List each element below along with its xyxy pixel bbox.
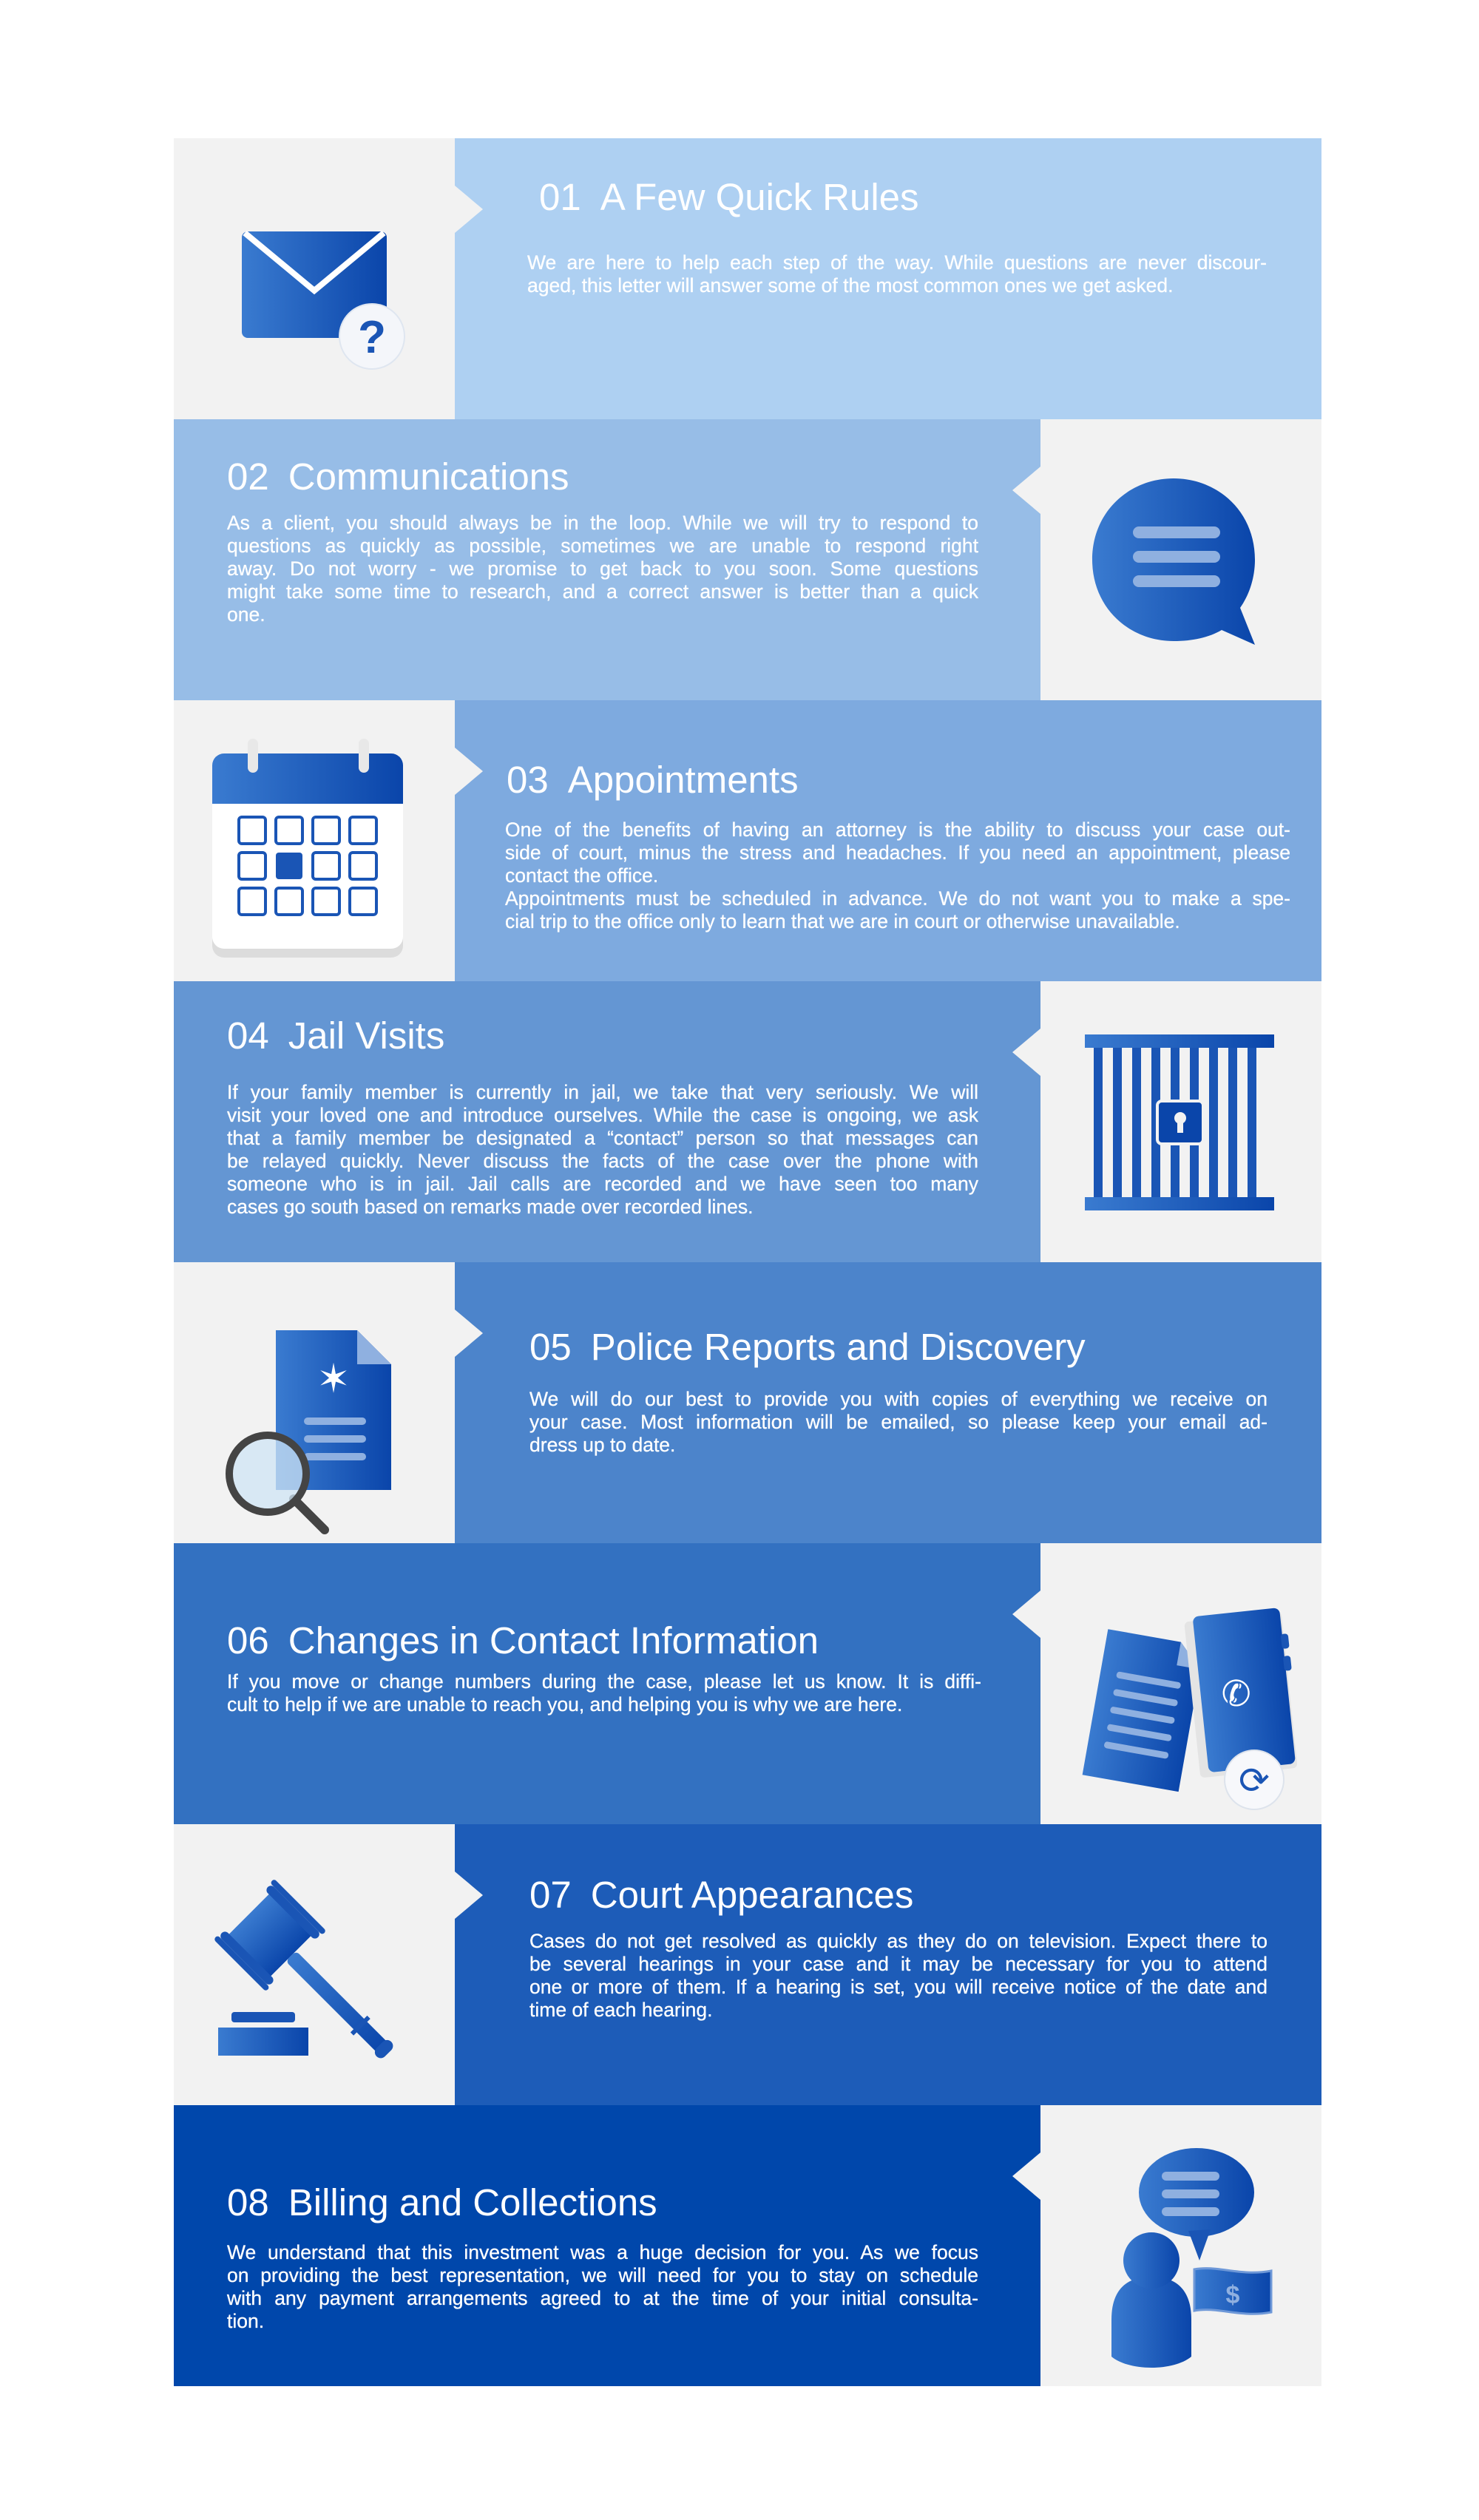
text: 06: If you move or change numbers during the case, please let us know. It is diffi- <box>227 1670 981 1693</box>
text: 04: If your family member is currently in jail, we take that very seriously. We will <box>227 1081 978 1103</box>
text: 02: might take some time to research, and a correct answer is better than a quick <box>227 580 978 603</box>
panel: 05 <box>455 1262 1321 1543</box>
panel: 08 <box>174 2105 1040 2386</box>
text: 04: someone who is in jail. Jail calls are recorded and we have seen too many <box>227 1173 978 1195</box>
heading: 03: 03 Appointments <box>507 759 799 801</box>
heading: 02: 02 Communications <box>227 455 569 498</box>
text: 04: that a family member be designated a “contact” person so that messages can <box>227 1127 978 1149</box>
panel: 02 <box>174 419 1040 700</box>
icon: calendar <box>212 739 403 958</box>
text: 08: tion. <box>227 2310 264 2332</box>
icon: jail bars <box>1085 1034 1274 1210</box>
panel: 06 <box>174 1543 1040 1824</box>
row 06: Changes in Contact Information <box>174 1543 1321 1824</box>
icon: documents, phone and refresh <box>1083 1608 1297 1810</box>
text: 07: be several hearings in your case and it may be necessary for you to attend <box>529 1953 1268 1975</box>
text: 08: with any payment arrangements agreed to at the time of your initial consulta- <box>227 2287 978 2309</box>
text: 05 <box>529 1388 1268 1456</box>
icon: person with speech bubble and money <box>1111 2148 1272 2368</box>
panel: 01 <box>455 138 1321 419</box>
text: 07 <box>529 1930 1268 2021</box>
text: 04: cases go south based on remarks made over recorded lines. <box>227 1196 753 1218</box>
text: 08 <box>226 2241 978 2332</box>
icon: envelope with question mark: ? <box>358 312 386 363</box>
icon: chat bubble <box>1092 478 1255 645</box>
text: 03: side of court, minus the stress and headaches. If you need an appointment, please <box>505 841 1290 864</box>
row 04: Jail Visits <box>174 981 1321 1262</box>
row 02: Communications <box>174 419 1321 700</box>
heading: 01: 01 A Few Quick Rules <box>539 176 919 218</box>
text: 01: aged, this letter will answer some of the most common ones we get asked. <box>527 274 1173 297</box>
panel: 04 <box>174 981 1040 1262</box>
text: 03 <box>504 819 1290 932</box>
icon: document with magnifier: ✶ <box>317 1355 351 1402</box>
text: 05: your case. Most information will be emailed, so please keep your email ad- <box>529 1411 1268 1433</box>
row 08: Billing and Collections <box>174 2105 1321 2386</box>
text: 02: As a client, you should always be in the loop. While we will try to respond to <box>227 512 978 534</box>
text: 01 <box>527 251 1267 297</box>
icon: document with magnifier <box>226 1330 391 1534</box>
heading: 07: 07 Court Appearances <box>529 1874 913 1916</box>
text: 03: Appointments must be scheduled in advance. We do not want you to make a spe- <box>505 887 1290 910</box>
text: 04: be relayed quickly. Never discuss the facts of the case over the phone with <box>227 1150 978 1172</box>
text: 01: We are here to help each step of the way. While questions are never discour- <box>527 251 1267 274</box>
panel: 07 <box>455 1824 1321 2105</box>
row 01: A Few Quick Rules <box>174 138 1321 419</box>
text: 05: We will do our best to provide you with copies of everything we receive on <box>529 1388 1268 1410</box>
icon: envelope with question mark <box>242 231 405 370</box>
text: 07: Cases do not get resolved as quickly as they do on television. Expect there to <box>529 1930 1268 1952</box>
icon: documents, phone and refresh: ✆ <box>1219 1672 1253 1716</box>
row 03: Appointments <box>174 700 1321 981</box>
text: 08: on providing the best representation, we will need for you to stay on schedule <box>227 2264 978 2286</box>
panel: 03 <box>455 700 1321 981</box>
text: 06: cult to help if we are unable to reach you, and helping you is why we are here. <box>227 1693 902 1715</box>
text: 02: questions as quickly as possible, sometimes we are unable to respond right <box>227 535 978 557</box>
heading: 05: 05 Police Reports and Discovery <box>529 1326 1086 1368</box>
text: 02: away. Do not worry - we promise to get back to you soon. Some questions <box>227 558 978 580</box>
text: 03: One of the benefits of having an attorney is the ability to discuss your case out- <box>505 819 1290 841</box>
icon: gavel <box>214 1880 393 2059</box>
icon: documents, phone and refresh: ⟳ <box>1239 1759 1270 1802</box>
row 05: Police Reports and Discovery <box>174 1262 1321 1543</box>
text: 06 <box>227 1670 981 1715</box>
text: 05: dress up to date. <box>529 1434 675 1456</box>
icon: person with speech bubble and money: $ <box>1226 2281 1240 2309</box>
text: 03: cial trip to the office only to learn that we are in court or otherwise unavailable. <box>505 910 1180 932</box>
row 07: Court Appearances <box>174 1824 1321 2105</box>
heading: 04: 04 Jail Visits <box>227 1015 444 1057</box>
text: 02 <box>226 512 979 626</box>
text: 07: time of each hearing. <box>529 1999 712 2021</box>
text: 08: We understand that this investment was a huge decision for you. As we focus <box>227 2241 978 2263</box>
text: 03: contact the office. <box>505 864 658 887</box>
heading: 06: 06 Changes in Contact Information <box>227 1619 819 1662</box>
heading: 08: 08 Billing and Collections <box>227 2181 657 2223</box>
text: 02: one. <box>227 603 265 626</box>
text: 04 <box>226 1081 979 1218</box>
text: 07: one or more of them. If a hearing is set, you will receive notice of the date and <box>529 1976 1268 1998</box>
text: 04: visit your loved one and introduce ourselves. While the case is ongoing, we ask <box>227 1104 978 1126</box>
